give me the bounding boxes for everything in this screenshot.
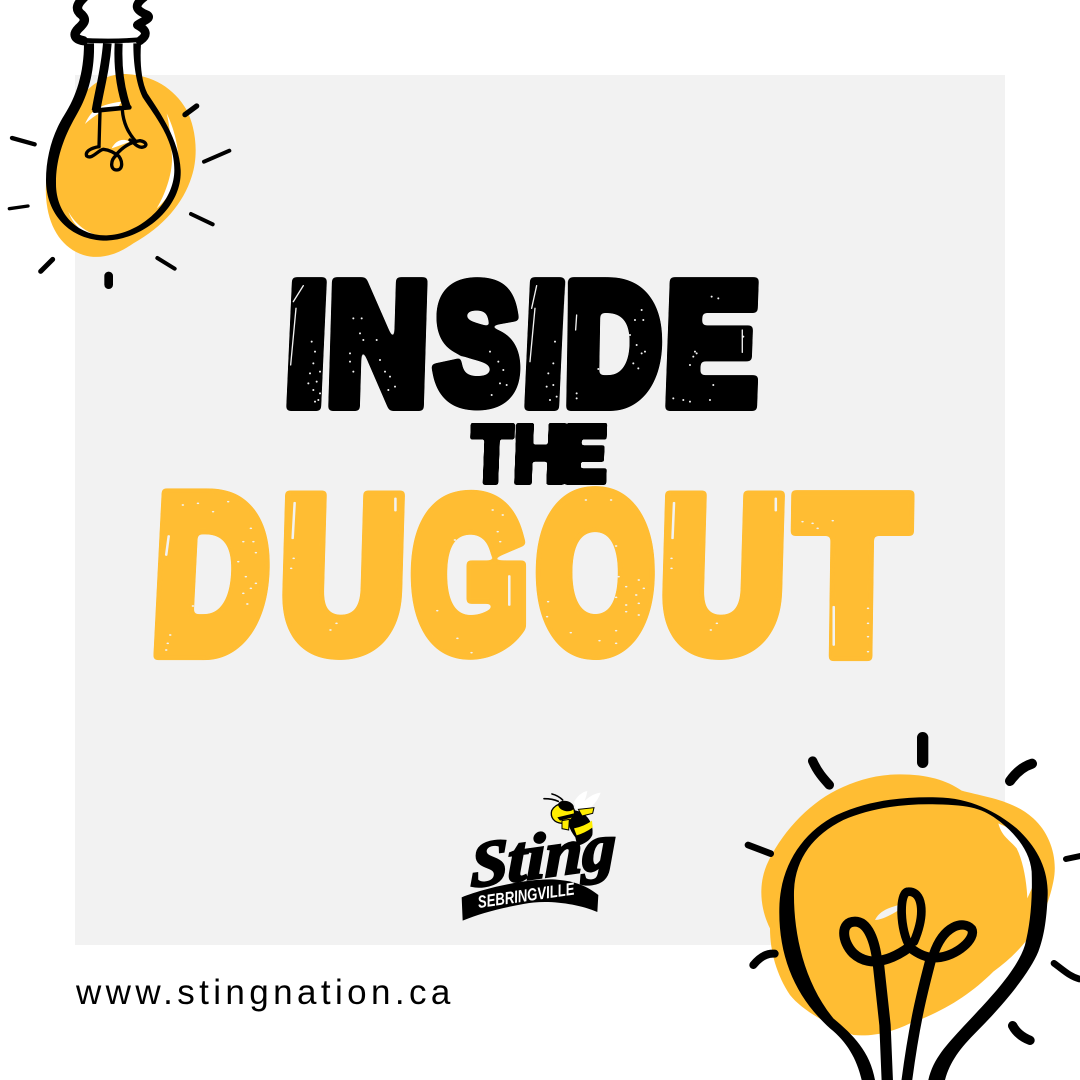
heading word: DUGOUT [149, 453, 914, 698]
title: inside the dugout [149, 249, 914, 698]
website url: www.stingnation.ca [76, 973, 455, 1012]
heading word: THE: H [513, 411, 568, 499]
heading word: DUGOUT: U [277, 456, 408, 694]
heading word: INSIDE: I [282, 249, 331, 440]
heading word: DUGOUT: T [795, 454, 908, 697]
logo bee mascot [544, 791, 601, 846]
heading word: THE [470, 411, 608, 499]
heading word: INSIDE: S [435, 252, 519, 437]
heading word: INSIDE: N [325, 249, 431, 440]
heading word: DUGOUT: U [657, 456, 788, 694]
panel: grey background [75, 75, 1005, 945]
heading word: DUGOUT: O [537, 453, 653, 695]
logo script wordmark: Sting [471, 810, 616, 901]
logo banner [462, 879, 598, 921]
heading word: THE: T [470, 411, 513, 499]
heading word: DUGOUT: D [149, 453, 275, 698]
heading word: INSIDE: I [520, 249, 569, 440]
heading word: INSIDE: E [662, 249, 761, 440]
logo banner: SEBRINGVILLE [476, 879, 576, 912]
heading word: DUGOUT: G [412, 458, 527, 694]
heading word: INSIDE [282, 249, 761, 440]
heading word: THE: E [563, 411, 608, 499]
heading word: INSIDE: D [563, 249, 663, 440]
